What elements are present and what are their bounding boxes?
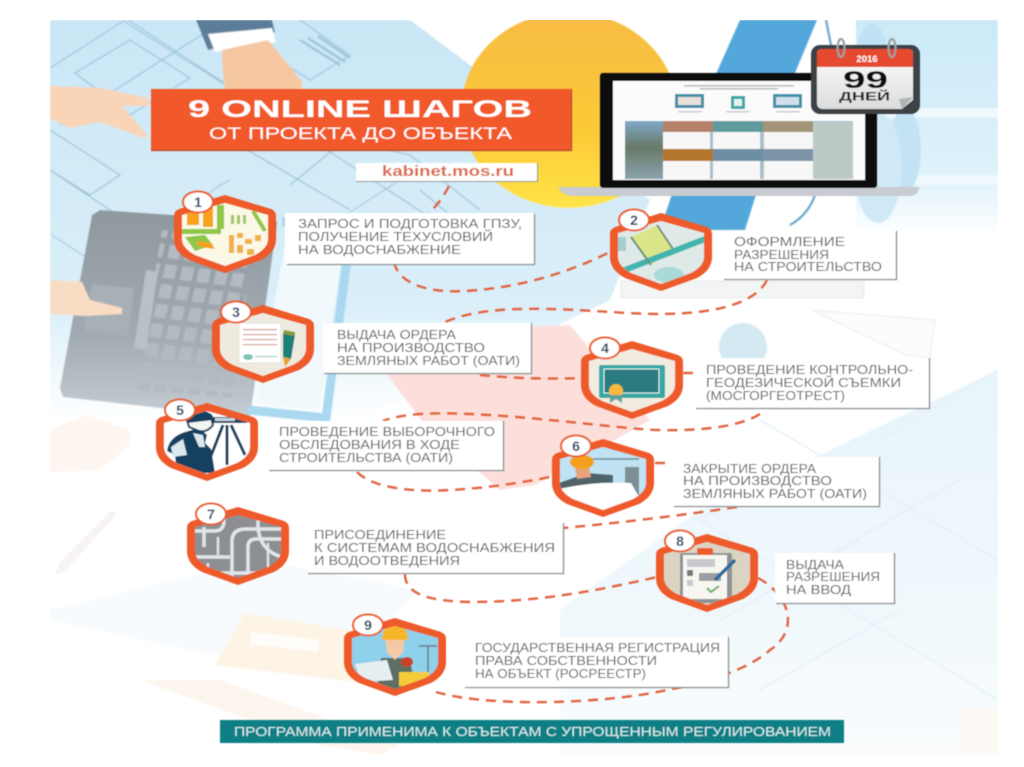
pale orange corner <box>962 712 997 754</box>
badge 8: 8 <box>676 533 684 549</box>
box 3: НА ПРОИЗВОДСТВО <box>337 341 485 355</box>
shield 7: pipes <box>187 504 289 585</box>
box 9 <box>464 637 728 688</box>
box 1: НА ВОДОСНАБЖЕНИЕ <box>298 243 461 257</box>
set square <box>812 310 935 358</box>
site heading <box>684 85 794 90</box>
blueprint lines <box>50 20 480 260</box>
ruler <box>621 281 864 298</box>
pale orange band <box>215 613 420 690</box>
box 9: ГОСУДАРСТВЕННАЯ РЕГИСТРАЦИЯ <box>475 641 720 655</box>
tablet screen <box>258 246 341 409</box>
shield 5: surveyor <box>156 400 258 481</box>
box 7: И ВОДООТВЕДЕНИЯ <box>314 554 460 568</box>
box 5: СТРОИТЕЛЬСТВА (ОАТИ) <box>279 451 453 465</box>
shield 2: site plan <box>610 210 712 291</box>
page curl <box>899 97 913 109</box>
right pipes <box>856 20 998 235</box>
box 2: ОФОРМЛЕНИЕ <box>734 235 845 249</box>
step 1 to 2 <box>394 186 610 291</box>
box 7: К СИСТЕМАМ ВОДОСНАБЖЕНИЯ <box>314 541 555 555</box>
box 1 <box>285 213 534 264</box>
shield 9: engineer <box>344 614 446 696</box>
box 6 <box>673 457 880 506</box>
box 4 <box>695 358 930 408</box>
box 4: ПРОВЕДЕНИЕ КОНТРОЛЬНО- <box>706 363 913 377</box>
subtitle: ОТ ПРОЕКТА ДО ОБЪЕКТА <box>209 125 512 143</box>
stripe line <box>790 20 832 225</box>
shield 4: certificate <box>581 338 683 419</box>
box 1: ПОЛУЧЕНИЕ ТЕХУСЛОВИЙ <box>298 229 493 244</box>
yellow hard hat <box>461 12 677 208</box>
laptop with site <box>558 73 920 196</box>
badge 6: 6 <box>572 438 580 454</box>
box 7: ПРИСОЕДИНЕНИЕ <box>314 528 446 542</box>
pink building <box>385 325 650 490</box>
step shields <box>156 192 758 696</box>
box 2 <box>723 231 896 280</box>
laptop base <box>558 187 920 196</box>
box 7 <box>308 523 564 574</box>
site photo <box>625 121 853 179</box>
step 8 to 9 <box>436 578 788 702</box>
tablet frame <box>248 222 352 418</box>
box 2: РАЗРЕШЕНИЯ <box>734 248 829 262</box>
touch pad <box>87 284 134 320</box>
calendar 99 days <box>811 39 920 114</box>
pale lens <box>718 322 768 358</box>
step 2 to 3 <box>445 280 767 322</box>
pale white strip <box>250 632 320 652</box>
blueprint panel top left <box>50 20 650 420</box>
box 6: НА ПРОИЗВОДСТВО <box>683 474 832 488</box>
box 2: НА СТРОИТЕЛЬСТВО <box>734 260 882 274</box>
laptop bezel <box>600 73 877 188</box>
box 6: ЗАКРЫТИЕ ОРДЕРА <box>683 462 817 476</box>
dashed route <box>357 186 788 702</box>
photo land <box>625 121 853 179</box>
lower pale blueprint <box>560 370 998 755</box>
step boxes <box>268 213 930 688</box>
pale pencil <box>55 510 116 575</box>
step 4 to 5 <box>383 413 760 430</box>
calendar page <box>817 49 913 109</box>
box 3: ВЫДАЧА ОРДЕРА <box>337 328 457 342</box>
step 7 to 8 <box>405 574 657 602</box>
shield 8: clipboard <box>656 530 758 612</box>
box 8: НА ВВОД <box>786 583 852 597</box>
badge 3: 3 <box>232 304 240 320</box>
badge 4: 4 <box>601 340 609 356</box>
box 4: (МОСГОРГЕОТРЕСТ) <box>706 389 845 403</box>
keys <box>146 230 247 397</box>
step 6 to 7 <box>563 507 737 528</box>
badge 7: 7 <box>207 506 215 522</box>
title banner <box>151 89 572 150</box>
badge 1: 1 <box>194 194 202 210</box>
pale blue band left <box>50 560 420 680</box>
box 6: ЗЕМЛЯНЫХ РАБОТ (ОАТИ) <box>683 487 867 501</box>
calendar header <box>817 49 913 67</box>
hand top <box>196 20 302 90</box>
laptop keyboard <box>60 210 277 418</box>
site cards <box>663 132 813 179</box>
box 9: НА ОБЪЕКТ (РОСРЕЕСТР) <box>475 667 646 681</box>
shield 1: map <box>174 192 276 273</box>
step 5 to 6 <box>357 463 672 491</box>
days word: ДНЕЙ <box>839 88 890 104</box>
laptop screen <box>613 81 865 180</box>
box 4: ГЕОДЕЗИЧЕСКОЙ СЪЕМКИ <box>706 375 901 390</box>
box 8: ВЫДАЧА <box>786 558 845 572</box>
box 8 <box>775 553 894 604</box>
box 8: РАЗРЕШЕНИЯ <box>786 570 880 584</box>
box 1: ЗАПРОС И ПОДГОТОВКА ГПЗУ, <box>298 217 522 231</box>
blue diagonal stripe <box>660 20 817 230</box>
pale lower lines <box>700 370 998 700</box>
box 5: ОБСЛЕДОВАНИЯ В ХОДЕ <box>279 438 460 452</box>
hand lower left <box>50 280 122 316</box>
site captions <box>678 111 800 112</box>
website link: kabinet.mos.ru <box>382 164 514 180</box>
box 3 <box>323 323 532 374</box>
badge 2: 2 <box>630 212 638 228</box>
badge 9: 9 <box>364 617 372 633</box>
space bar <box>134 270 158 350</box>
pale orange strip <box>140 680 400 755</box>
year: 2016 <box>856 54 878 65</box>
footer text: ПРОГРАММА ПРИМЕНИМА К ОБЪЕКТАМ С УПРОЩЕННЫМ РЕГУЛИРОВАНИЕМ <box>234 725 831 739</box>
banner edge <box>151 89 572 150</box>
box 3: ЗЕМЛЯНЫХ РАБОТ (ОАТИ) <box>337 354 520 368</box>
pale hand <box>50 415 130 472</box>
box 5: ПРОВЕДЕНИЕ ВЫБОРОЧНОГО <box>279 425 495 439</box>
website link <box>356 163 538 182</box>
footer banner <box>220 720 844 743</box>
box 9: ПРАВА СОБСТВЕННОСТИ <box>475 654 657 668</box>
badge 5: 5 <box>176 402 184 418</box>
number of days: 99 <box>843 67 888 94</box>
shield 3: document and pen <box>212 302 314 383</box>
site icons <box>675 94 802 109</box>
title: 9 ONLINE ШАГОВ <box>188 96 532 123</box>
rings <box>838 39 896 57</box>
hand pointing left <box>50 86 150 138</box>
shield 6: worker with plan <box>552 436 654 517</box>
box 5 <box>268 421 504 470</box>
pipe highlights <box>854 23 998 223</box>
step 3 to 4 <box>480 373 697 379</box>
